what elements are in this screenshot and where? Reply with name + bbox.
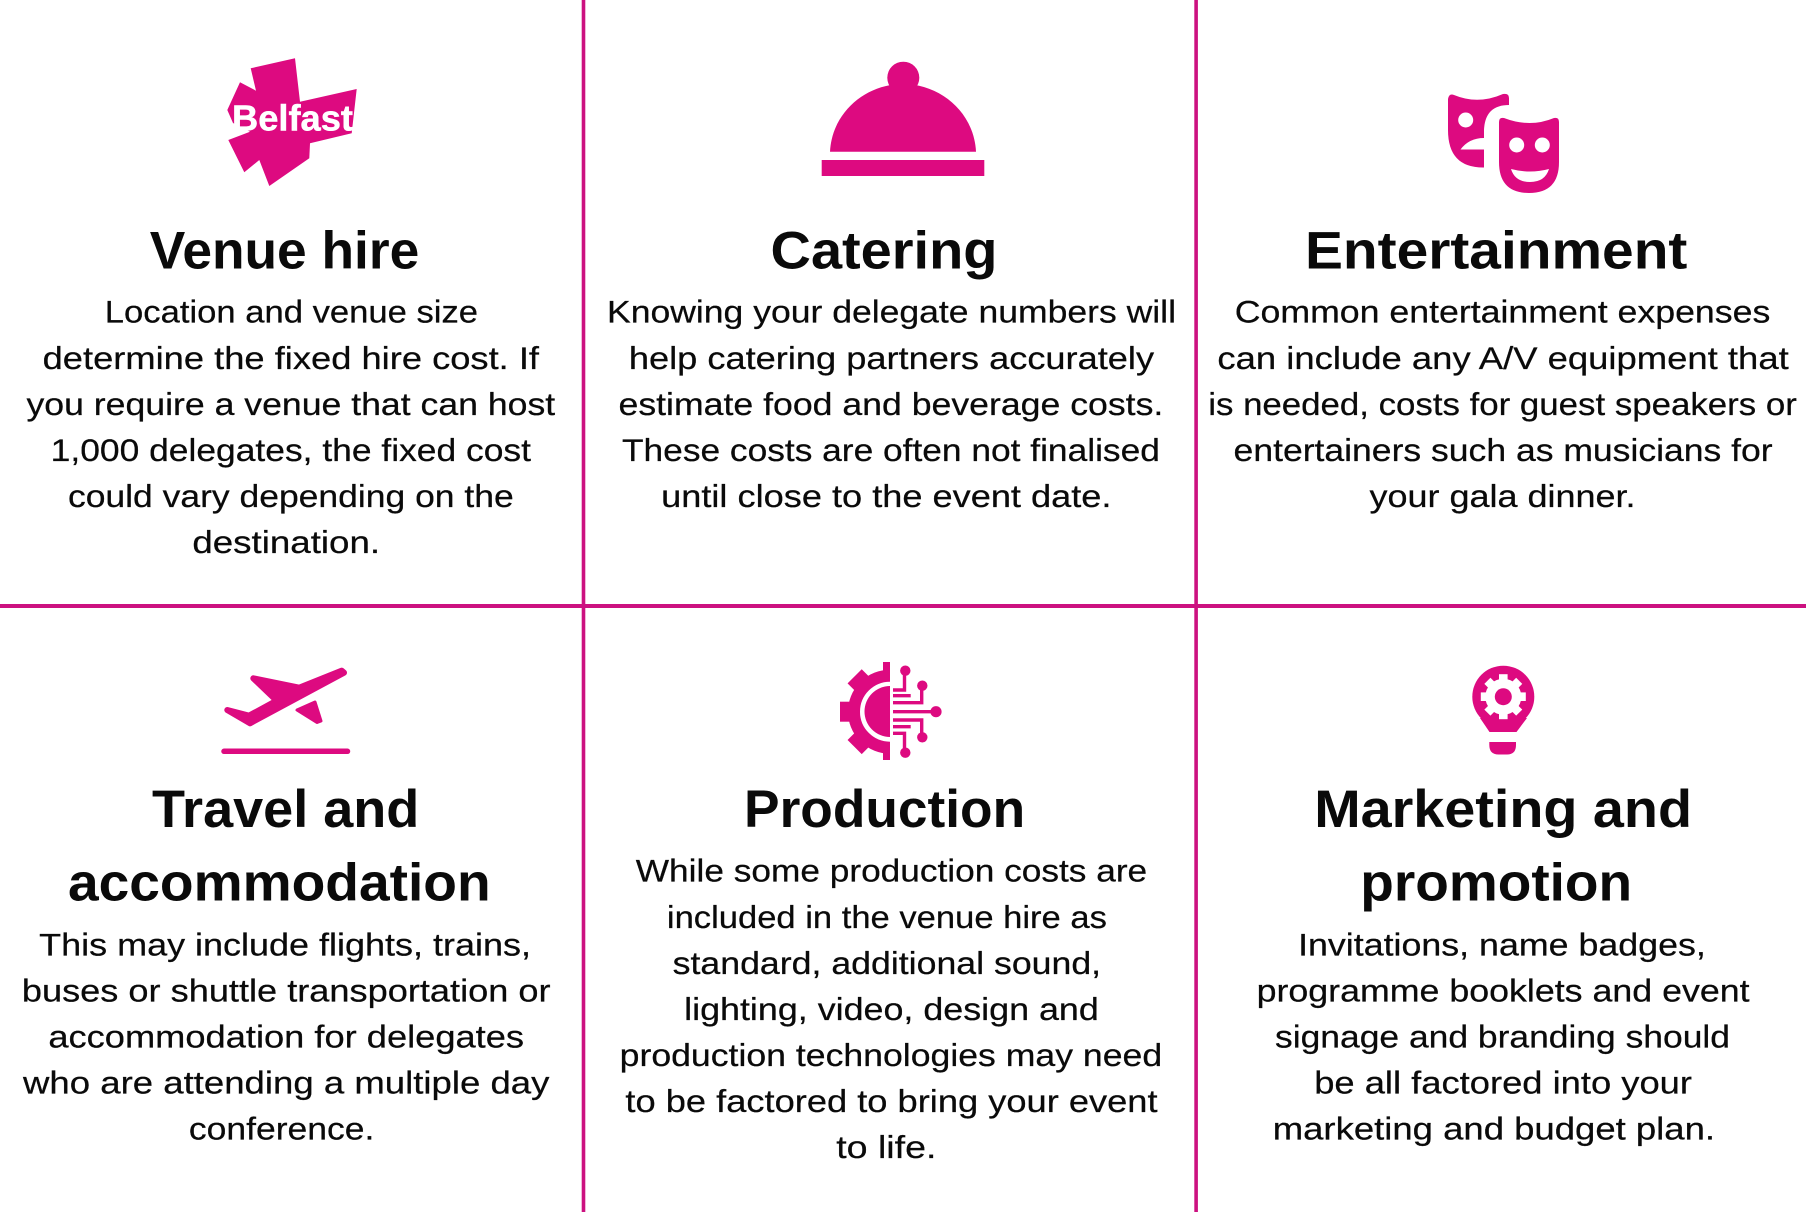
text: entertainment description: Common entertainment expenses (1235, 295, 1770, 330)
text: marketing description (1257, 927, 1750, 1147)
icon: aeroplane taking off (224, 671, 348, 751)
text: production description: production technologies may need (620, 1038, 1162, 1073)
heading: Catering: Catering (771, 222, 997, 280)
text: marketing description: programme booklets and event (1257, 973, 1750, 1008)
text: venue hire description: destination. (192, 525, 380, 560)
text: travel description: accommodation for delegates (48, 1020, 524, 1055)
text: production description: included in the venue hire as (667, 900, 1107, 935)
text: entertainment description: can include any A/V equipment that (1217, 341, 1789, 376)
text: venue hire description: you require a venue that can host (26, 387, 556, 422)
text: production description: lighting, video, design and (684, 992, 1099, 1027)
text: catering description: until close to the event date. (661, 479, 1111, 514)
icon: gear with circuit (840, 662, 942, 760)
heading: Production: Production (744, 781, 1025, 839)
text: entertainment description: is needed, costs for guest speakers or (1208, 387, 1797, 422)
text: venue hire description (26, 295, 556, 560)
text: catering description: estimate food and beverage costs. (619, 387, 1163, 422)
text: venue hire description: 1,000 delegates, the fixed cost (51, 433, 531, 468)
text: travel description (22, 927, 551, 1147)
text: entertainment description (1208, 295, 1797, 514)
heading: Entertainment: Entertainment (1305, 222, 1687, 280)
icon: Belfast logo (227, 58, 357, 186)
text: travel description: This may include flights, trains, (39, 927, 531, 962)
text: marketing description: be all factored into your (1314, 1066, 1692, 1101)
heading: Travel and accommodation: Travel and (152, 781, 419, 839)
text: entertainment description: entertainers such as musicians for (1234, 433, 1773, 468)
text: venue hire description: Location and venue size (105, 295, 478, 330)
text: marketing description: marketing and budget plan. (1273, 1112, 1715, 1147)
text: travel description: who are attending a multiple day (22, 1066, 550, 1101)
text: entertainment description: your gala dinner. (1369, 479, 1636, 514)
text: travel description: buses or shuttle transportation or (22, 973, 551, 1008)
text: production description: standard, additional sound, (673, 946, 1101, 981)
heading: Marketing and promotion (1314, 781, 1692, 913)
heading: Venue hire: Venue hire (150, 222, 419, 280)
text: production description: to life. (836, 1130, 936, 1165)
text: catering description (607, 295, 1176, 514)
heading: Travel and accommodation: accommodation (68, 855, 491, 913)
text: production description: While some production costs are (636, 854, 1147, 889)
icon: theatre masks (1448, 94, 1559, 193)
heading: Travel and accommodation (68, 781, 491, 913)
text: marketing description: Invitations, name badges, (1298, 927, 1706, 962)
text: catering description: help catering partners accurately (629, 341, 1155, 376)
text: travel description: conference. (189, 1112, 374, 1147)
heading: Marketing and promotion: Marketing and (1314, 781, 1692, 839)
text: catering description: These costs are often not finalised (622, 433, 1160, 468)
text: marketing description: signage and branding should (1275, 1020, 1730, 1055)
icon: light bulb with gear (1472, 666, 1534, 754)
text: venue hire description: could vary depending on the (68, 479, 514, 514)
icon: Belfast logo: Belfast (232, 98, 353, 138)
text: production description: to be factored to bring your event (625, 1084, 1158, 1119)
heading: Marketing and promotion: promotion (1360, 855, 1632, 913)
text: venue hire description: determine the fixed hire cost. If (43, 341, 539, 376)
icon: catering cloche (822, 62, 984, 176)
text: production description (620, 854, 1162, 1165)
text: catering description: Knowing your delegate numbers will (607, 295, 1176, 330)
